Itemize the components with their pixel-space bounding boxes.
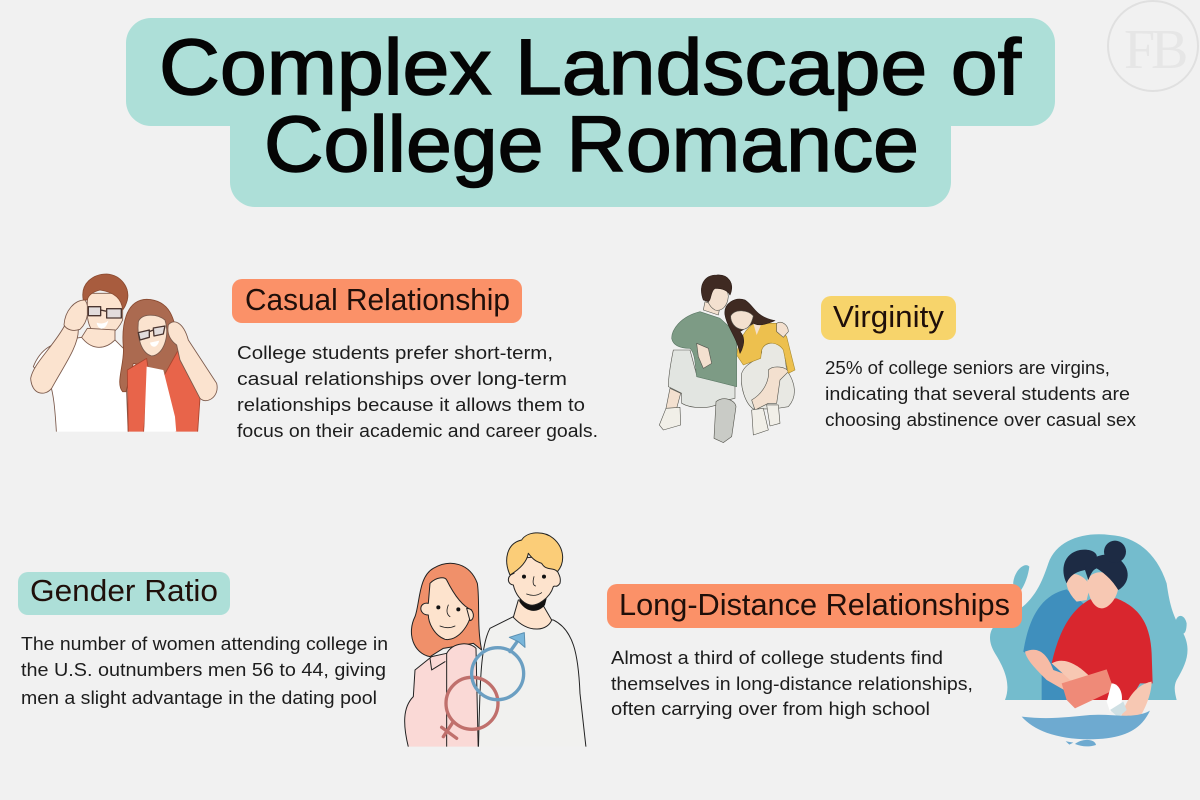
text: gender ratio bbox=[21, 634, 388, 708]
text: gender ratio: The number of women attending college in bbox=[21, 634, 388, 654]
text: gender ratio: the U.S. outnumbers men 56 to 44, giving bbox=[21, 660, 386, 680]
text: long-distance relationships bbox=[611, 648, 973, 719]
illustration: couple with gender symbols bbox=[405, 533, 587, 753]
heading: gender ratio bbox=[18, 572, 230, 615]
illustration: couple sitting bbox=[659, 275, 795, 443]
title banner bbox=[126, 18, 1055, 207]
logo: FB monogram: F bbox=[1124, 19, 1155, 81]
heading: virginity: Virginity bbox=[833, 300, 945, 334]
title text bbox=[159, 22, 1022, 188]
text: virginity: 25% of college seniors are virgins, bbox=[825, 358, 1110, 378]
text: virginity: indicating that several students are bbox=[825, 384, 1130, 404]
panel: virginity bbox=[659, 275, 1136, 443]
text: virginity bbox=[825, 358, 1136, 430]
text: casual relationship: focus on their academic and career goals. bbox=[237, 421, 598, 441]
text: gender ratio: men a slight advantage in the dating pool bbox=[21, 688, 377, 708]
heading: long-distance relationships: Long-Distance Relationships bbox=[619, 588, 1010, 622]
heading: virginity bbox=[821, 296, 956, 340]
illustration: couple washing hands bbox=[990, 534, 1188, 746]
title text: Complex Landscape of bbox=[159, 22, 1022, 111]
heading: gender ratio: Gender Ratio bbox=[30, 574, 218, 608]
title text: College Romance bbox=[264, 99, 919, 188]
panel: long-distance relationships bbox=[607, 534, 1188, 746]
text: casual relationship: relationships because it allows them to bbox=[237, 395, 585, 415]
illustration: couple adjusting glasses bbox=[31, 274, 217, 437]
logo: FB monogram bbox=[1108, 1, 1198, 91]
text: casual relationship: College students prefer short-term, bbox=[237, 343, 553, 363]
text: casual relationship: casual relationships over long-term bbox=[237, 369, 567, 389]
panel: casual relationship bbox=[31, 274, 598, 441]
logo: FB monogram: B bbox=[1151, 19, 1188, 81]
text: casual relationship bbox=[237, 343, 598, 441]
text: long-distance relationships: Almost a third of college students find bbox=[611, 648, 943, 668]
heading: casual relationship: Casual Relationship bbox=[245, 283, 510, 317]
text: long-distance relationships: often carrying over from high school bbox=[611, 699, 930, 719]
text: virginity: choosing abstinence over casual sex bbox=[825, 410, 1136, 430]
panel: gender ratio bbox=[18, 533, 587, 753]
text: long-distance relationships: themselves in long-distance relationships, bbox=[611, 674, 973, 694]
